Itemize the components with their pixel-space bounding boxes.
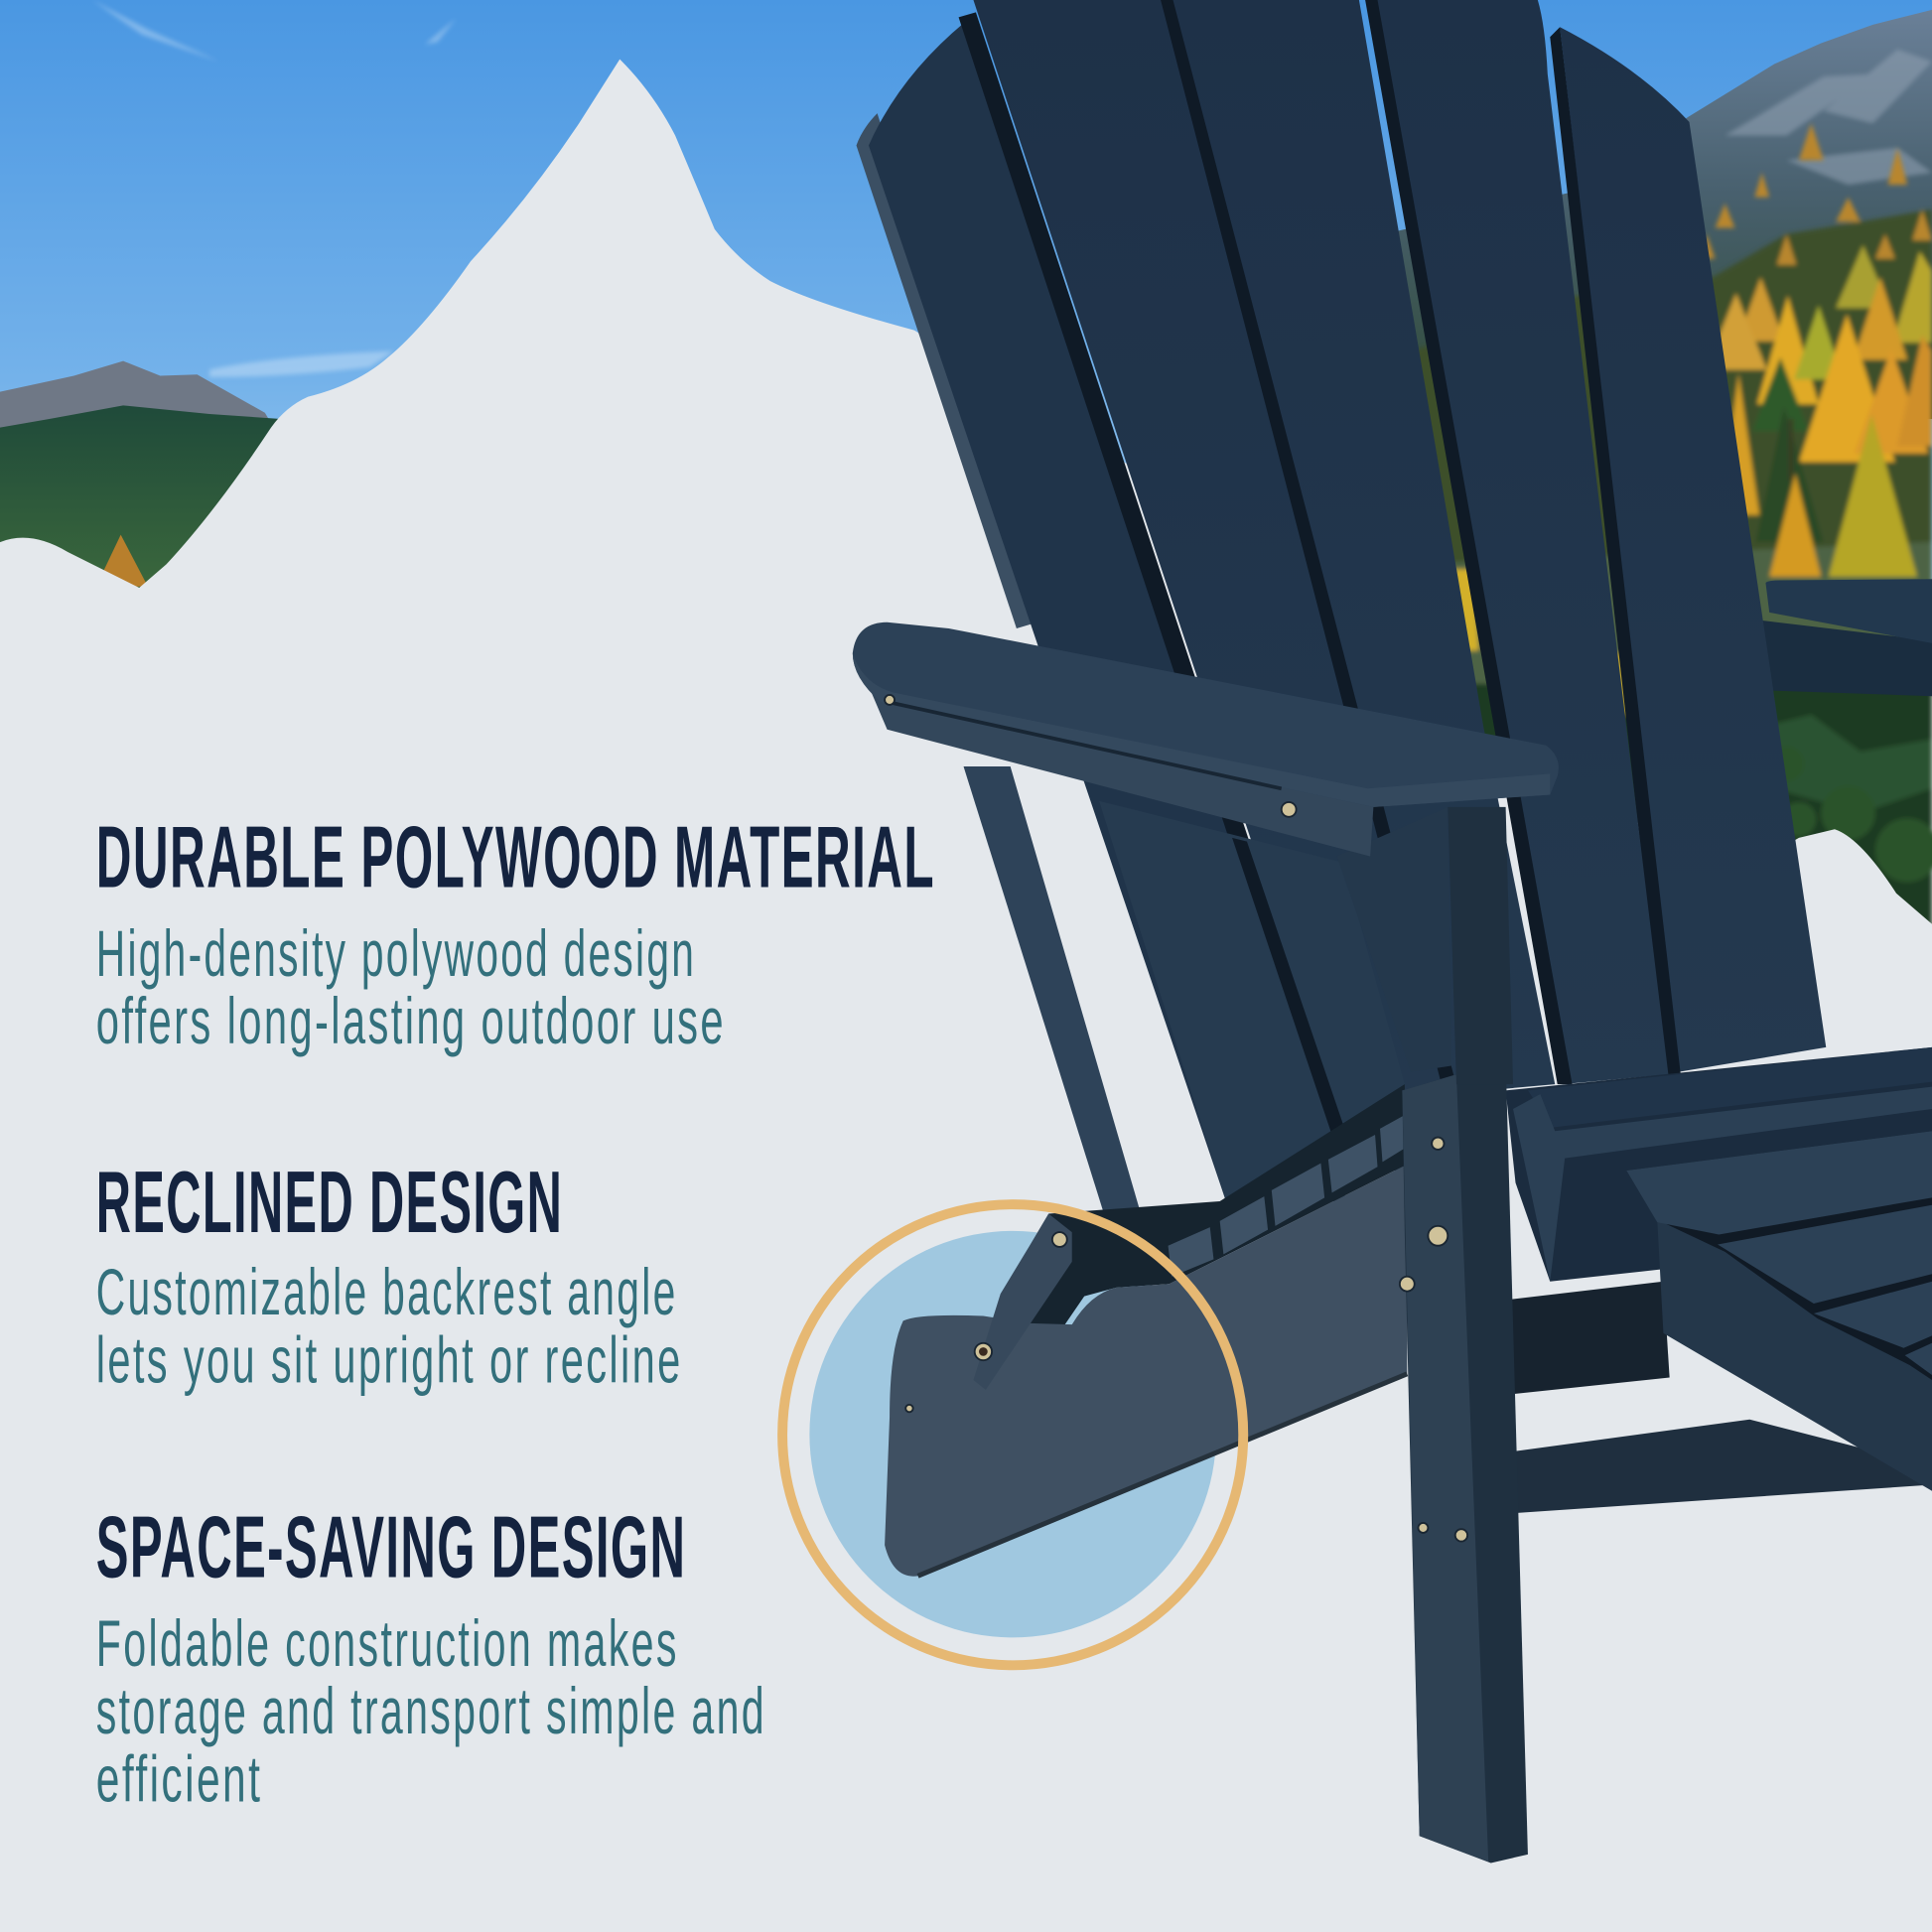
body line 1: Customizable backrest angle xyxy=(96,1255,678,1328)
lower slat shade xyxy=(1099,801,1405,1201)
larch trees xyxy=(1892,251,1932,343)
side table right xyxy=(1756,579,1932,696)
rock scree xyxy=(1725,50,1932,185)
mountain right xyxy=(1355,10,1932,419)
forest right xyxy=(1355,123,1932,942)
footrest slat 1 xyxy=(1626,1131,1932,1235)
lower gap line xyxy=(1232,838,1350,1146)
callout ring: folding hinge xyxy=(782,1204,1243,1665)
footrest xyxy=(1626,1131,1932,1491)
feature: space-saving design xyxy=(96,1498,766,1815)
body line 3: efficient xyxy=(96,1741,262,1815)
body line 1: High-density polywood design xyxy=(96,916,696,990)
front leg post xyxy=(1402,807,1528,1863)
body line 2: offers long-lasting outdoor use xyxy=(96,984,726,1057)
feature: reclined design xyxy=(96,1153,683,1396)
back slats xyxy=(857,0,1826,1201)
mountain landscape photo backdrop xyxy=(0,0,1932,942)
feature: durable polywood material xyxy=(96,808,935,1057)
slat gap line 1-2 xyxy=(959,12,1358,1171)
heading: SPACE-SAVING DESIGN xyxy=(96,1498,686,1596)
slat 4 xyxy=(1368,0,1668,1084)
distant mountain left xyxy=(0,361,283,444)
yellow flecks seen through slat gaps xyxy=(1453,569,1478,650)
callout disc behind hinge xyxy=(809,1231,1216,1637)
gap line 4-5 xyxy=(1550,27,1681,1074)
slat 4 left shadow edge xyxy=(1365,0,1573,1084)
adirondack chair xyxy=(853,0,1932,1863)
lower cross brace xyxy=(1513,1420,1932,1513)
seat front edge xyxy=(1513,1087,1932,1282)
bolt hole xyxy=(979,1347,988,1356)
footrest slat 3 xyxy=(1814,1282,1932,1348)
clouds xyxy=(92,0,456,377)
slat 1 xyxy=(869,22,1345,1201)
seat underside dark xyxy=(1506,1282,1670,1395)
footrest dark base xyxy=(1626,1131,1932,1386)
rail shadow xyxy=(985,1084,1407,1390)
heading: DURABLE POLYWOOD MATERIAL xyxy=(96,808,935,906)
heading: RECLINED DESIGN xyxy=(96,1153,563,1251)
seat side rail xyxy=(885,1165,1407,1577)
foreground shrubs xyxy=(1769,747,1932,883)
seat cleats xyxy=(1169,1115,1405,1277)
orange tree left xyxy=(96,535,148,587)
body line 2: lets you sit upright or recline xyxy=(96,1322,683,1396)
body line 2: storage and transport simple and xyxy=(96,1674,766,1747)
far rear strut xyxy=(964,766,1140,1210)
block under armrest xyxy=(1337,807,1451,1072)
bolts xyxy=(885,695,1467,1542)
slat 3 xyxy=(1169,0,1555,1097)
footrest side xyxy=(1657,1220,1932,1491)
tree trunks xyxy=(1789,419,1793,481)
small hillside larches xyxy=(1698,123,1932,265)
dark forest base xyxy=(1355,209,1932,592)
body line 1: Foldable construction makes xyxy=(96,1606,679,1680)
seat frame back xyxy=(1506,1047,1932,1282)
slat gap line 2-3 xyxy=(1161,0,1478,1171)
slat 2 xyxy=(973,0,1472,1171)
armrest xyxy=(853,622,1559,857)
slat 1 side edge xyxy=(857,113,1037,628)
folding brace xyxy=(973,1213,1072,1390)
footrest slat 4 xyxy=(1905,1343,1932,1375)
forest hill left xyxy=(0,405,323,604)
rail bottom edge xyxy=(918,1374,1407,1576)
sky xyxy=(0,0,1932,690)
seat top plate xyxy=(1528,1047,1932,1128)
footrest slat 2 xyxy=(1718,1205,1932,1304)
slat 5 xyxy=(1560,27,1826,1072)
